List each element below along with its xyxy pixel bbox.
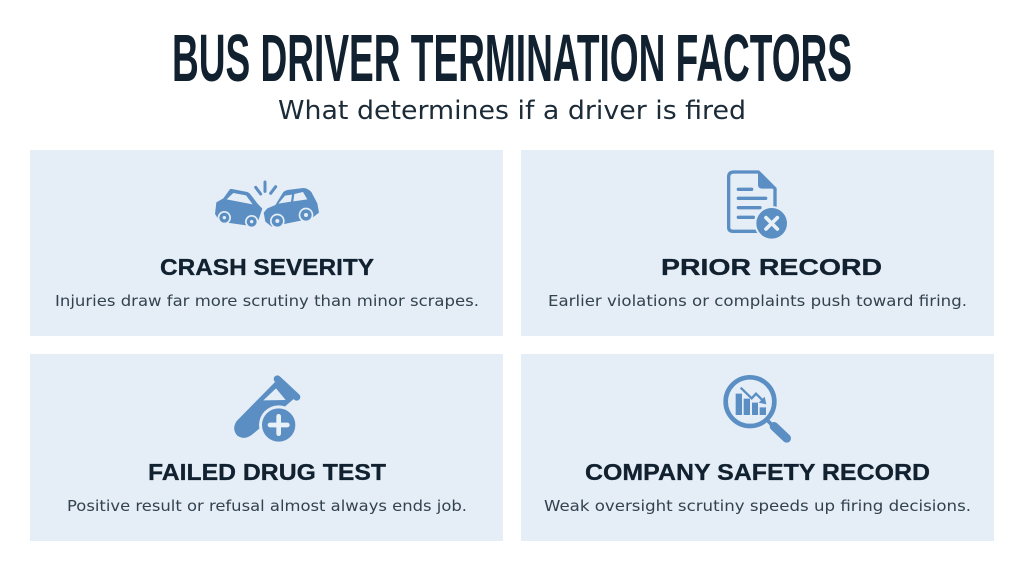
icon: test tube with plus [234,379,298,445]
description: company safety record: Weak oversight scrutiny speeds up firing decisions. [544,497,971,515]
description: prior record: Earlier violations or complaints push toward firing. [548,292,967,310]
panel: company safety record [521,354,994,541]
icon: magnifier over chart [726,377,787,438]
panel: crash severity [30,150,503,336]
heading: crash severity: CRASH SEVERITY [160,254,374,280]
panel: prior record [521,150,994,336]
subtitle: What determines if a driver is fired [278,96,746,126]
description: crash severity: Injuries draw far more scrutiny than minor scrapes. [55,292,479,310]
icon: document with x [729,172,789,241]
panel: failed drug test [30,354,503,541]
heading: company safety record: COMPANY SAFETY RECORD [585,459,930,485]
heading: prior record: PRIOR RECORD [661,254,882,280]
description: failed drug test: Positive result or refusal almost always ends job. [67,497,467,515]
heading: failed drug test: FAILED DRUG TEST [148,459,386,485]
icon: car crash [215,182,319,228]
